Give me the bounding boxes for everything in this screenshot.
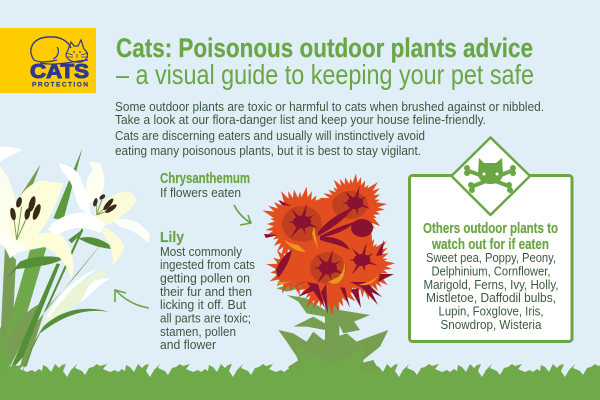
panel heading: Others outdoor plants to <box>423 221 558 237</box>
arrow: to chrysanthemum <box>234 205 251 225</box>
lily label: getting pollen on <box>160 272 250 286</box>
intro text: eating many poisonous plants, but it is best to stay vigilant. <box>115 144 421 158</box>
chrysanthemum stem and leaves <box>277 282 388 377</box>
plant list: Delphinium, Cornflower, <box>432 264 550 278</box>
logo: Cats Protection: CATS <box>30 61 89 83</box>
lily label: stamen, pollen <box>160 325 236 339</box>
lily label: Most commonly <box>160 245 243 259</box>
chrysanthemum label: If flowers eaten <box>160 186 241 200</box>
panel heading: watch out for if eaten <box>431 237 549 253</box>
lily label: ingested from cats <box>160 258 255 272</box>
lily label: licking it off. But <box>160 298 246 312</box>
title <box>116 33 534 90</box>
chrysanthemum label <box>160 171 250 200</box>
intro text: Cats are discerning eaters and usually will instinctively avoid <box>115 129 425 143</box>
lily label: and flower <box>160 338 216 352</box>
icon: cat skull and crossbones in diamond <box>452 138 530 215</box>
lily label: their fur and then <box>160 285 252 299</box>
arrow: to lily <box>115 290 149 308</box>
intro text: Take a look at our flora-danger list and keep your house feline-friendly. <box>115 113 486 127</box>
lily label <box>160 230 255 352</box>
lily stamens <box>9 193 118 240</box>
plant list: Lupin, Foxglove, Iris, <box>438 304 544 318</box>
plant list: Mistletoe, Daffodil bulbs, <box>426 291 556 305</box>
panel: other outdoor plants <box>410 138 572 342</box>
plant list: Marigold, Ferns, Ivy, Holly, <box>424 278 558 292</box>
grass ground <box>0 364 600 400</box>
lily plant illustration <box>0 146 150 377</box>
plant list: Snowdrop, Wisteria <box>440 318 542 332</box>
plant list <box>424 251 558 332</box>
plant list: Sweet pea, Poppy, Peony, <box>426 251 556 265</box>
lily label: Lily <box>160 230 184 246</box>
chrysanthemum label: Chrysanthemum <box>160 171 250 187</box>
logo: Cats Protection <box>0 28 96 93</box>
chrysanthemum flower head <box>252 168 400 324</box>
lily label: all parts are toxic; <box>160 312 251 326</box>
intro text: Some outdoor plants are toxic or harmful to cats when brushed against or nibbled. <box>115 100 544 114</box>
panel heading <box>423 221 558 253</box>
intro text <box>115 100 544 158</box>
logo: Cats Protection: PROTECTION <box>32 82 88 88</box>
